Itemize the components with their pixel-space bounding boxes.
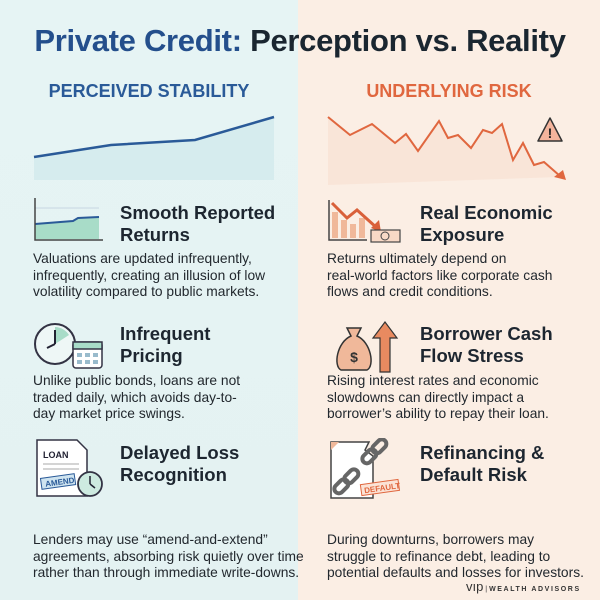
body text: day market price swings. — [33, 406, 185, 421]
icon: warning — [538, 118, 562, 141]
item: borrower cash flow stress — [327, 321, 553, 421]
body text: potential defaults and losses for investors. — [327, 565, 584, 580]
icon: falling bars and money — [328, 200, 401, 243]
heading: Borrower Cash — [420, 323, 553, 344]
chart: volatile line with warning — [327, 116, 566, 185]
body text — [33, 532, 304, 580]
body text — [327, 251, 552, 299]
body text: Rising interest rates and economic — [327, 373, 539, 388]
icon: clock and calendar — [34, 323, 103, 369]
heading: Flow Stress — [420, 345, 524, 366]
body text: Valuations are updated infrequently, — [33, 251, 252, 266]
heading: Delayed Loss — [120, 442, 239, 463]
heading: Refinancing & — [420, 442, 544, 463]
heading: Infrequent — [120, 323, 210, 344]
body text: borrower’s ability to repay their loan. — [327, 406, 549, 421]
icon: broken chain with default stamp — [330, 438, 401, 499]
heading — [120, 442, 239, 485]
item: smooth reported returns — [33, 198, 275, 299]
body text — [327, 373, 549, 421]
heading: Default Risk — [420, 464, 527, 485]
body text: volatility compared to public markets. — [33, 284, 259, 299]
icon: broken chain with default stamp: DEFAULT — [364, 481, 401, 495]
icon: warning: ! — [548, 125, 552, 141]
heading — [420, 202, 553, 245]
title: Private Credit: Perception vs. Reality — [34, 23, 566, 58]
heading: perceived stability: PERCEIVED STABILITY — [49, 81, 249, 101]
heading: Returns — [120, 224, 190, 245]
heading: Pricing — [120, 345, 183, 366]
icon: area chart — [34, 198, 103, 241]
body text: flows and credit conditions. — [327, 284, 493, 299]
icon: loan document: AMEND — [45, 476, 75, 489]
item: refinancing and default risk — [327, 438, 584, 580]
body text — [33, 251, 266, 299]
icon: loan document: LOAN — [43, 450, 68, 460]
heading: Exposure — [420, 224, 504, 245]
body text: slowdowns can directly impact a — [327, 390, 524, 404]
body text: Unlike public bonds, loans are not — [33, 373, 240, 388]
heading — [120, 323, 210, 366]
item: infrequent pricing — [33, 323, 240, 421]
body text — [33, 373, 240, 421]
body text: rather than through immediate write-downs. — [33, 565, 299, 580]
body text: infrequently, creating an illusion of low — [33, 268, 265, 282]
body text: real-world factors like corporate cash — [327, 268, 552, 282]
heading — [420, 323, 553, 366]
heading: underlying risk: UNDERLYING RISK — [366, 81, 532, 101]
heading: Recognition — [120, 464, 227, 485]
logo: vıp | WEALTH ADVISORS — [466, 579, 581, 594]
heading: Real Economic — [420, 202, 553, 223]
heading: Smooth Reported — [120, 202, 275, 223]
heading — [120, 202, 275, 245]
icon: money bag and up arrow: $ — [350, 349, 358, 365]
icon: money bag and up arrow — [336, 321, 398, 373]
body text: Lenders may use “amend-and-extend” — [33, 532, 268, 547]
item: delayed loss recognition — [33, 439, 304, 580]
body text: During downturns, borrowers may — [327, 532, 534, 547]
body text — [327, 532, 584, 580]
chart: smooth line — [34, 116, 274, 180]
body text: Returns ultimately depend on — [327, 251, 506, 266]
body text: traded daily, which avoids day-to- — [33, 390, 237, 404]
item: real economic exposure — [327, 200, 553, 299]
icon: loan document — [36, 439, 103, 497]
body text: agreements, absorbing risk quietly over time — [33, 548, 304, 564]
body text: struggle to refinance debt, leading to — [327, 548, 550, 564]
heading — [420, 442, 544, 485]
